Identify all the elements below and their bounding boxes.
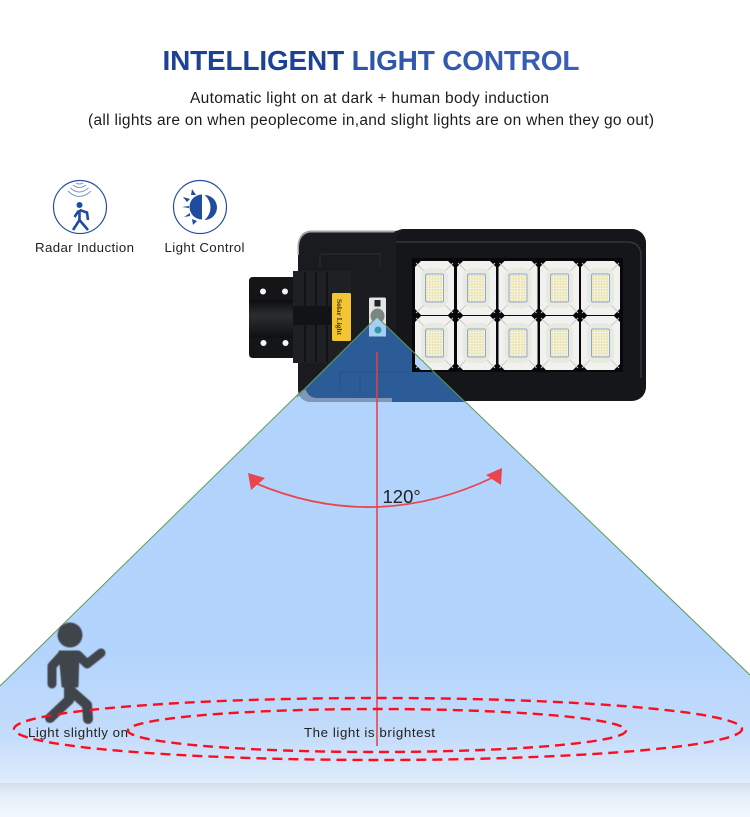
LED modules: [415, 261, 620, 370]
centre axis: [376, 352, 378, 746]
walking person: [50, 622, 101, 719]
title: INTELLIGENT LIGHT CONTROL: [162, 45, 580, 76]
label: the light is brightest: The light is brightest: [304, 725, 435, 740]
arrow: 120 degree arc: [248, 468, 502, 507]
street lamp: [249, 229, 646, 402]
subtitle: (all lights are on when peoplecome in,and slight lights are on when they go out): [88, 112, 654, 129]
lamp body: [298, 229, 646, 402]
subtitle: [88, 90, 654, 129]
label: solar light: Solar Light: [335, 299, 344, 336]
light cone: [0, 317, 750, 817]
sensor: [369, 298, 386, 336]
label: solar light: [332, 293, 351, 341]
label: radar induction: Radar Induction: [35, 240, 134, 255]
clamp block: [293, 271, 351, 363]
mounting bracket: [249, 277, 297, 358]
subtitle: Automatic light on at dark + human body induction: [190, 90, 549, 107]
icon: light control: [174, 180, 226, 234]
angle label: 120°: [382, 486, 421, 507]
label: light control: Light Control: [164, 240, 245, 255]
detection zone: outer ring: [14, 698, 742, 760]
detection zone: inner ring: [128, 709, 626, 752]
cone edges over lamp: [297, 317, 465, 402]
icon: radar induction: [54, 180, 106, 234]
label: light slightly on: Light slightly on: [28, 725, 128, 740]
cone overlay on lamp: [297, 317, 480, 402]
